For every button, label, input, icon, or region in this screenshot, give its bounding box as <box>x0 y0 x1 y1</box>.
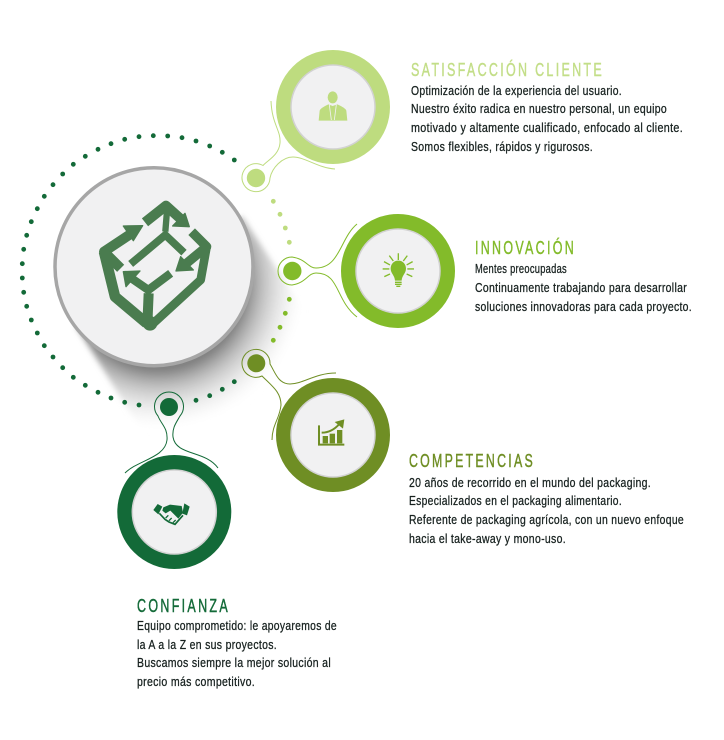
icon: handshake <box>153 503 190 524</box>
heading: confianza: CONFIANZA <box>137 595 230 616</box>
connector: innovación <box>278 224 357 317</box>
icon: box with recycling arrows <box>104 206 207 331</box>
text block: confianza: Equipo comprometido: le apoyaremos de <box>137 618 337 633</box>
panel: confianza <box>125 462 337 689</box>
heading: satisfacción cliente: SATISFACCIÓN CLIENTE <box>411 59 604 80</box>
text block: confianza: precio más competitivo. <box>137 674 255 689</box>
text block: competencias <box>409 475 684 546</box>
dotted ring: light green dots <box>271 199 292 245</box>
text block: competencias: hacia el take-away y mono-uso. <box>409 531 566 546</box>
ring: innovación <box>348 222 448 320</box>
text block: satisfacción: Somos flexibles, rápidos y rigurosos. <box>411 139 593 154</box>
panel: satisfacción cliente <box>284 58 683 156</box>
heading: innovación: INNOVACIÓN <box>475 237 576 258</box>
icon: business person <box>319 91 347 121</box>
icon: light bulb <box>383 253 414 286</box>
text block: confianza: la A a la Z en sus proyectos. <box>137 637 277 652</box>
inner rim: confianza <box>132 470 216 554</box>
text block: confianza: Buscamos siempre la mejor solución al <box>137 655 331 670</box>
icon: growth chart <box>319 419 344 445</box>
connector: satisfacción cliente <box>242 101 335 192</box>
text block: innovación <box>475 261 692 314</box>
ring: satisfacción <box>284 58 382 156</box>
inner rim: competencias <box>291 393 375 477</box>
connector: confianza <box>125 392 218 473</box>
inner rim: innovación <box>356 229 440 313</box>
inner rim: satisfacción <box>291 65 375 149</box>
text block: satisfacción: Optimización de la experiencia del usuario. <box>411 83 622 98</box>
heading: competencias: COMPETENCIAS <box>409 450 535 471</box>
central circle with packaging box icon <box>55 168 253 366</box>
text block: satisfacción <box>411 83 683 154</box>
text block: innovación: Mentes preocupadas <box>475 261 567 276</box>
connector: competencias <box>242 349 336 440</box>
dotted ring: mid green dots <box>271 297 292 343</box>
text block: competencias: Especializados en el packaging alimentario. <box>409 493 622 508</box>
ring: competencias <box>284 386 382 484</box>
dotted ring: dark green dots <box>20 133 237 407</box>
panel: innovación <box>348 222 692 320</box>
panel: competencias <box>284 386 684 546</box>
text block: competencias: 20 años de recorrido en el mundo del packaging. <box>409 475 651 490</box>
long shadow of main circle <box>76 216 345 480</box>
ring: confianza <box>125 462 224 562</box>
text block: confianza <box>137 618 337 689</box>
